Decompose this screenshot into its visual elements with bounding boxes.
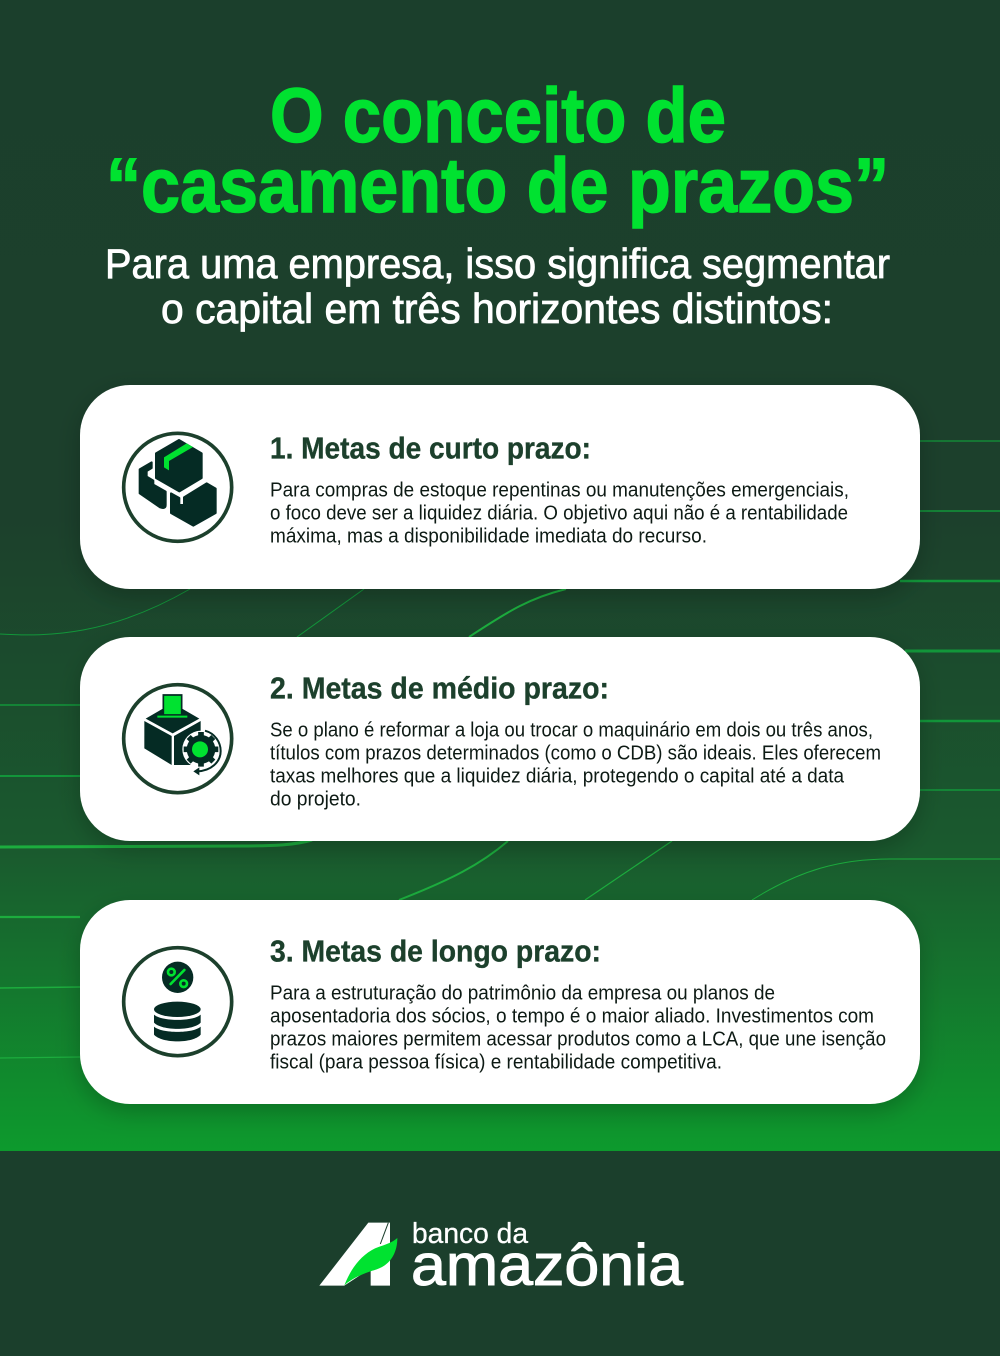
- title: [106, 73, 889, 229]
- subtitle: o capital em três horizontes distintos:: [161, 285, 833, 332]
- panel: short-term goals: [80, 385, 920, 589]
- heading: 1. Metas de curto prazo:: [270, 430, 591, 466]
- body text: prazos maiores permitem acessar produtos como a LCA, que une isenção: [270, 1028, 886, 1050]
- panel: long-term goals: [80, 900, 920, 1104]
- heading: 3. Metas de longo prazo:: [270, 934, 601, 968]
- logo wordmark: banco da: [412, 1218, 529, 1250]
- title: “casamento de prazos”: [106, 143, 889, 229]
- body text: Se o plano é reformar a loja ou trocar o maquinário em dois ou três anos,: [270, 720, 873, 742]
- body text: Para a estruturação do patrimônio da empresa ou planos de: [270, 982, 775, 1004]
- heading: 2. Metas de médio prazo:: [270, 670, 609, 706]
- footer band: [0, 1151, 1000, 1356]
- icon: box with gear: [124, 685, 232, 793]
- body text: [270, 720, 881, 810]
- body text: [270, 480, 849, 548]
- logo mark: [319, 1223, 397, 1286]
- body text: títulos com prazos determinados (como o CDB) são ideais. Eles oferecem: [270, 742, 881, 764]
- icon: stacked boxes: [124, 433, 232, 541]
- body text: máxima, mas a disponibilidade imediata do recurso.: [270, 526, 707, 548]
- subtitle: [105, 240, 890, 332]
- body text: taxas melhores que a liquidez diária, protegendo o capital até a data: [270, 766, 845, 788]
- body text: [270, 982, 886, 1074]
- logo wordmark: amazônia: [411, 1233, 684, 1298]
- body text: Para compras de estoque repentinas ou manutenções emergenciais,: [270, 480, 849, 502]
- title: O conceito de: [270, 73, 726, 159]
- icon: percent badge and coin stack: [124, 948, 232, 1056]
- body text: o foco deve ser a liquidez diária. O objetivo aqui não é a rentabilidade: [270, 502, 848, 524]
- body text: aposentadoria dos sócios, o tempo é o maior aliado. Investimentos com: [270, 1006, 874, 1028]
- background flowing lines: [0, 441, 1000, 1058]
- panel: medium-term goals: [80, 637, 920, 841]
- body text: do projeto.: [270, 788, 361, 810]
- subtitle: Para uma empresa, isso significa segmentar: [105, 240, 890, 287]
- body text: fiscal (para pessoa física) e rentabilidade competitiva.: [270, 1052, 722, 1074]
- logo: banco da amazônia: [319, 1218, 684, 1298]
